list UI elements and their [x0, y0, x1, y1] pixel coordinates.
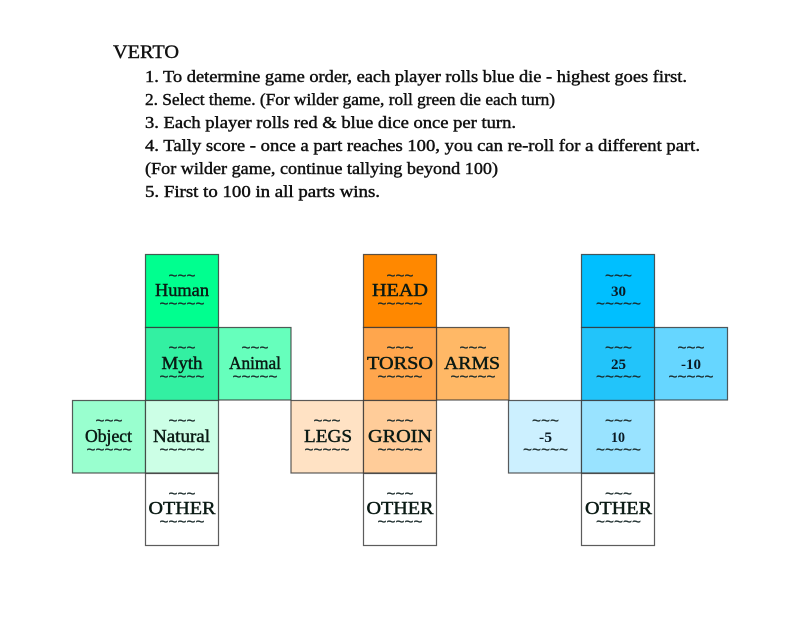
cell: -10: ~~~~~ [668, 369, 714, 386]
cell: ARMS [436, 328, 509, 400]
cell: OTHER: ~~~~~ [596, 514, 641, 531]
cell: OTHER: ~~~ [386, 486, 414, 503]
rules text block: 5. First to 100 in all parts wins. [145, 182, 380, 201]
cell: -10: -10 [681, 357, 701, 373]
cell: Myth: ~~~~~ [160, 369, 204, 386]
cell: Human: Human [155, 280, 209, 300]
cell: GROIN: ~~~~~ [378, 442, 422, 459]
cell: Natural: ~~~~~ [160, 442, 204, 459]
cell: GROIN: GROIN [368, 426, 432, 446]
cell: 10: ~~~ [605, 413, 632, 430]
cell: Natural: ~~~ [168, 413, 196, 430]
cell: 10: ~~~~~ [596, 442, 641, 459]
panel: body part die net (orange) [291, 254, 509, 546]
rules text block: (For wilder game, continue tallying beyond 100) [145, 159, 498, 178]
cell: 25: 25 [611, 357, 626, 373]
cell: Human: ~~~~~ [160, 296, 204, 313]
cell: OTHER: ~~~~~ [378, 514, 422, 531]
cell: -10: ~~~ [678, 340, 704, 357]
cell: 10: 10 [611, 430, 625, 446]
cell: LEGS: ~~~ [314, 413, 340, 430]
cell: OTHER: OTHER [585, 498, 652, 518]
cell: Human [146, 254, 218, 328]
cell: Animal: ~~~~~ [232, 369, 278, 386]
cell: HEAD: ~~~ [386, 268, 414, 285]
cell: ARMS: ARMS [444, 353, 500, 373]
cell: OTHER [582, 474, 654, 546]
panel: score die net (blue) [508, 254, 728, 546]
cell: -10 [654, 328, 728, 400]
cell: 30: 30 [611, 284, 626, 300]
cell: TORSO: TORSO [367, 353, 433, 373]
cell: GROIN [364, 400, 436, 473]
cell: Object [72, 400, 146, 473]
cell: OTHER: ~~~~~ [160, 514, 204, 531]
title: VERTO [113, 42, 179, 63]
cell: HEAD: ~~~~~ [378, 296, 422, 313]
cell: Natural: Natural [153, 426, 210, 446]
cell: Object: ~~~ [96, 413, 122, 430]
cell: ARMS: ~~~ [460, 340, 486, 357]
cell: 10 [582, 400, 654, 473]
cell: LEGS: LEGS [304, 426, 352, 446]
cell: TORSO [364, 328, 436, 400]
cell: Myth: Myth [162, 353, 202, 373]
cell: Human: ~~~ [168, 268, 196, 285]
cell: TORSO: ~~~~~ [378, 369, 422, 386]
rules text block [145, 67, 700, 201]
cell: -5 [508, 400, 582, 473]
cell: HEAD [364, 254, 436, 328]
cell: Animal: Animal [229, 353, 281, 373]
rules text block: 4. Tally score - once a part reaches 100, you can re-roll for a different part. [145, 136, 700, 155]
cell: HEAD: HEAD [372, 280, 428, 300]
panel: theme die net (green) [72, 254, 291, 546]
cell: OTHER: OTHER [148, 498, 216, 518]
cell: GROIN: ~~~ [386, 413, 414, 430]
cell: OTHER: ~~~ [605, 486, 632, 503]
cell: Object: ~~~~~ [86, 442, 132, 459]
cell: LEGS: ~~~~~ [304, 442, 350, 459]
cell: Animal [218, 328, 291, 400]
cell: TORSO: ~~~ [386, 340, 414, 357]
rules text block: 1. To determine game order, each player rolls blue die - highest goes first. [145, 67, 687, 86]
rules text block: 2. Select theme. (For wilder game, roll green die each turn) [145, 90, 555, 109]
cell: 30: ~~~~~ [596, 296, 641, 313]
cell: -5: ~~~~~ [523, 442, 568, 459]
rules text block: 3. Each player rolls red & blue dice once per turn. [145, 113, 516, 132]
cell: Myth: ~~~ [168, 340, 196, 357]
cell: OTHER [364, 474, 436, 546]
cell: ARMS: ~~~~~ [450, 369, 496, 386]
cell: OTHER: OTHER [366, 498, 434, 518]
cell: Myth [146, 328, 218, 400]
cell: 25: ~~~~~ [596, 369, 641, 386]
cell: Animal: ~~~ [242, 340, 268, 357]
cell: 25 [582, 328, 654, 400]
cell: Natural [146, 400, 218, 473]
cell: -5: -5 [539, 430, 552, 446]
cell: -5: ~~~ [532, 413, 559, 430]
cell: 30 [582, 254, 654, 328]
cell: OTHER [146, 474, 218, 546]
cell: Object: Object [85, 426, 132, 446]
cell: LEGS [291, 400, 364, 473]
cell: 30: ~~~ [605, 268, 632, 285]
cell: 25: ~~~ [605, 340, 632, 357]
cell: OTHER: ~~~ [168, 486, 196, 503]
